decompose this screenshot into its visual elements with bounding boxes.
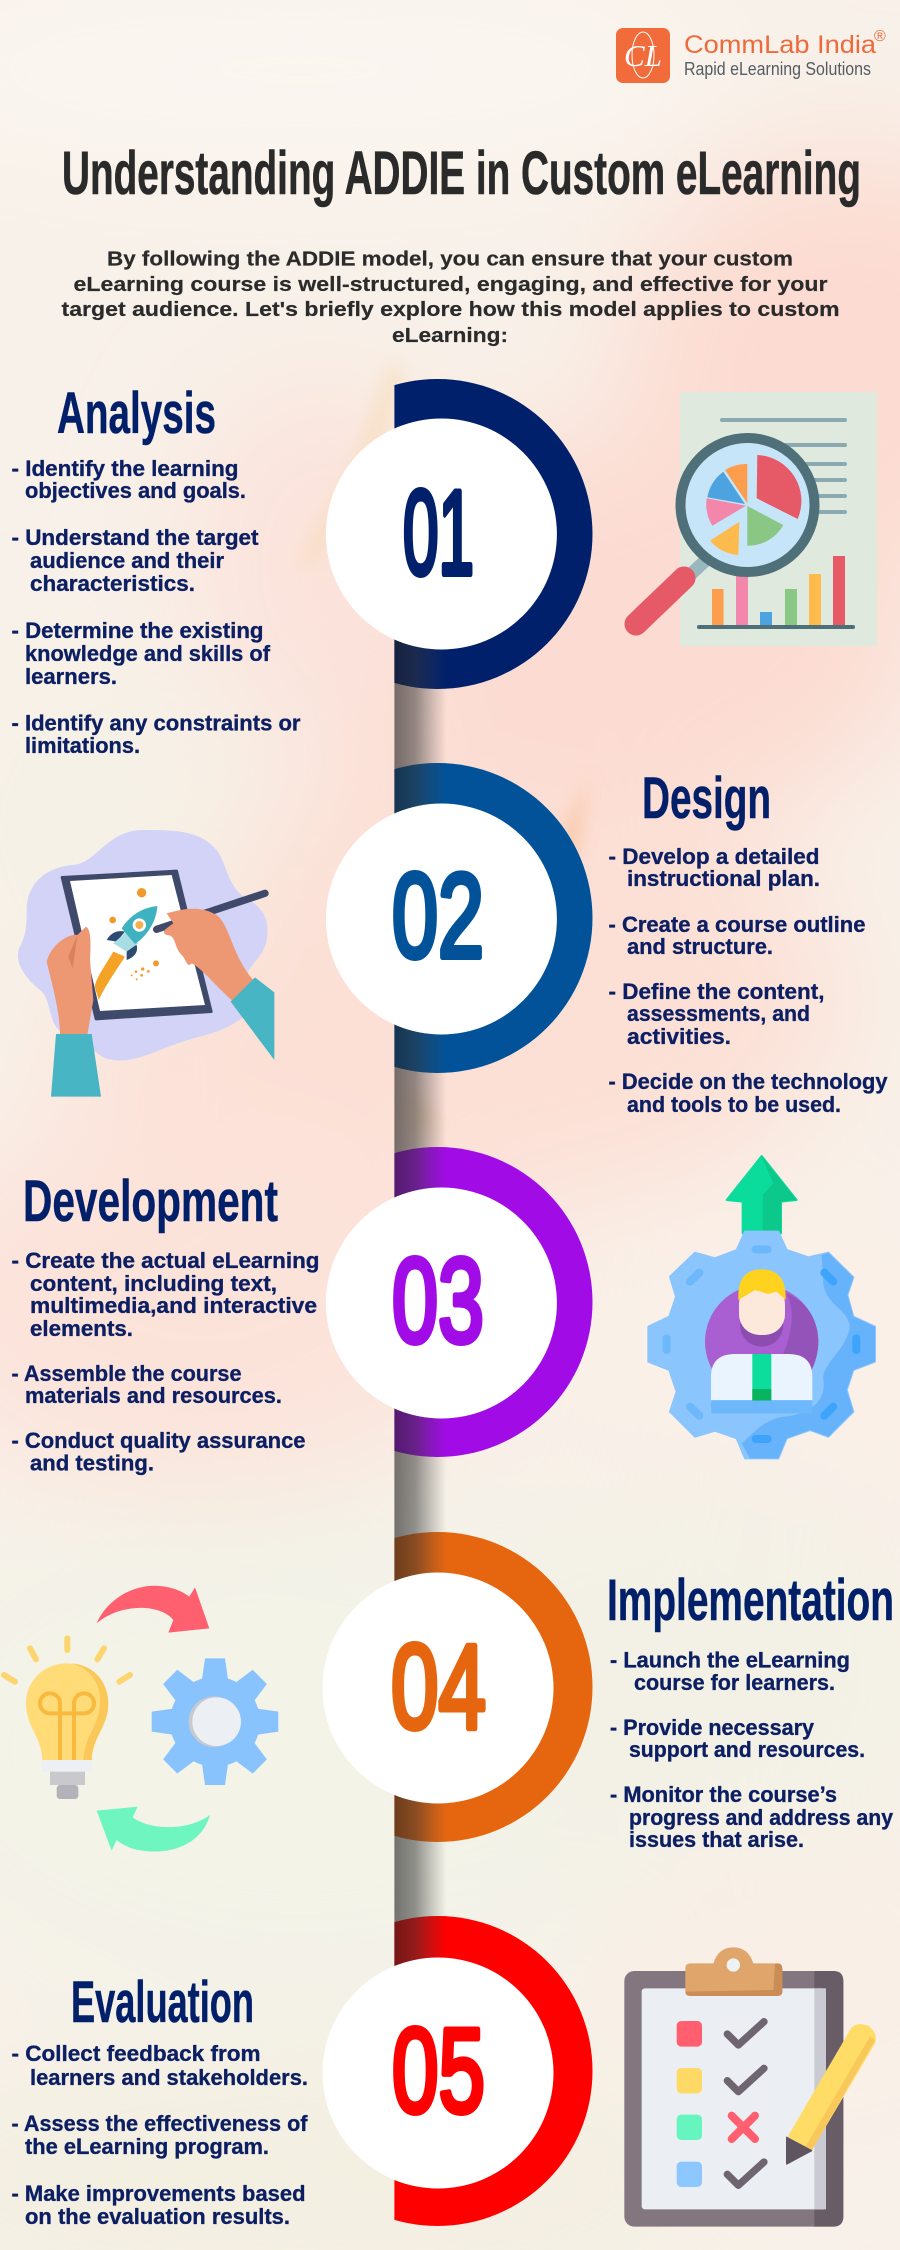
logo mark	[616, 28, 670, 83]
evaluation bullets: - Make improvements based	[12, 2181, 306, 2206]
implementation bullets: - Provide necessary	[610, 1715, 815, 1740]
logo: CommLab India	[616, 28, 886, 83]
implementation bullets: issues that arise.	[629, 1827, 804, 1852]
analysis bullets: - Identify any constraints or	[12, 710, 301, 736]
analysis bullets: limitations.	[25, 733, 140, 758]
design bullets: and tools to be used.	[627, 1092, 841, 1117]
analysis bullets: audience and their	[30, 548, 224, 573]
evaluation bullets	[12, 2041, 308, 2229]
panel: development	[12, 1169, 320, 1476]
central spine shadow	[394, 640, 446, 2080]
step 01 badge	[326, 418, 557, 650]
panel: analysis	[12, 381, 301, 758]
ring: 02	[394, 763, 592, 1073]
development bullets: content, including text,	[30, 1271, 277, 1296]
logo mark: CL	[624, 38, 662, 73]
panel: evaluation	[12, 1970, 308, 2229]
panel: design	[608, 766, 888, 1117]
evaluation bullets: the eLearning program.	[25, 2134, 269, 2159]
implementation bullets: support and resources.	[629, 1737, 865, 1762]
red arrow	[97, 1586, 209, 1633]
green arrow	[97, 1807, 210, 1852]
ring: 04	[394, 1532, 592, 1842]
analysis bullets: learners.	[25, 664, 117, 689]
analysis bullets: - Identify the learning	[12, 456, 238, 481]
implementation bullets	[610, 1648, 894, 1852]
ring: 03	[394, 1147, 592, 1457]
step 04 badge	[322, 1572, 554, 1804]
design bullets: assessments, and	[627, 1001, 810, 1026]
panel: implementation	[607, 1568, 894, 1852]
registered mark: ®	[874, 28, 886, 45]
implementation bullets: - Launch the eLearning	[610, 1648, 850, 1672]
step 02 badge	[326, 804, 557, 1034]
heading: analysis: Analysis	[57, 381, 216, 446]
step 05 badge	[322, 1958, 554, 2188]
step 01 badge: 01	[403, 466, 474, 600]
step 03 badge: 03	[392, 1234, 484, 1368]
icon: magnifier over charts	[636, 392, 877, 646]
development bullets: and testing.	[30, 1450, 154, 1476]
development bullets: multimedia,and interactive	[30, 1293, 317, 1318]
analysis bullets: - Determine the existing	[12, 618, 264, 643]
analysis bullets: characteristics.	[30, 571, 195, 596]
implementation bullets: course for learners.	[634, 1670, 835, 1695]
step 02 badge: 02	[392, 849, 484, 983]
evaluation bullets: - Collect feedback from	[12, 2041, 260, 2066]
design bullets: - Define the content,	[608, 979, 824, 1004]
ring: 01	[394, 379, 592, 689]
heading: design: Design	[642, 766, 771, 831]
analysis bullets	[12, 456, 301, 758]
development bullets: materials and resources.	[25, 1383, 282, 1408]
evaluation bullets: learners and stakeholders.	[30, 2065, 308, 2090]
design bullets: - Decide on the technology	[608, 1069, 888, 1094]
design bullets	[608, 844, 888, 1117]
design bullets: - Create a course outline	[608, 912, 866, 937]
logo name: CommLab India	[684, 31, 876, 59]
gear	[152, 1658, 278, 1785]
analysis bullets: objectives and goals.	[25, 478, 246, 503]
design bullets: - Develop a detailed	[608, 844, 820, 869]
step 05 badge: 05	[392, 2004, 485, 2138]
implementation bullets: progress and address any	[629, 1805, 894, 1830]
intro paragraph: eLearning:	[392, 324, 508, 347]
step 03 badge	[326, 1188, 557, 1418]
analysis bullets: - Understand the target	[12, 525, 259, 550]
design bullets: instructional plan.	[627, 866, 820, 891]
light bulb	[4, 1638, 130, 1799]
development bullets	[12, 1248, 320, 1476]
icon: hands drawing on a tablet	[18, 830, 274, 1097]
step 04 badge: 04	[391, 1620, 486, 1754]
development bullets: - Assemble the course	[12, 1361, 242, 1386]
intro paragraph: eLearning course is well-structured, engaging, and effective for your	[74, 273, 828, 296]
development bullets: - Conduct quality assurance	[12, 1428, 306, 1453]
development bullets: elements.	[30, 1316, 133, 1341]
icon: bulb, gear and cycle arrows	[4, 1586, 278, 1852]
analysis bullets: knowledge and skills of	[25, 641, 271, 666]
implementation bullets: - Monitor the course’s	[610, 1782, 837, 1807]
heading: development: Development	[23, 1169, 278, 1234]
intro paragraph	[62, 248, 840, 347]
evaluation bullets: - Assess the effectiveness of	[12, 2111, 308, 2136]
logo tagline: Rapid eLearning Solutions	[684, 59, 871, 79]
heading: evaluation: Evaluation	[71, 1970, 254, 2035]
evaluation bullets: on the evaluation results.	[25, 2204, 290, 2229]
icon: person in gear with up arrow	[648, 1156, 875, 1458]
development bullets: - Create the actual eLearning	[12, 1248, 320, 1273]
intro paragraph: target audience. Let's briefly explore how this model applies to custom	[62, 298, 840, 321]
ring: 05	[394, 1916, 592, 2226]
intro paragraph: By following the ADDIE model, you can ensure that your custom	[107, 248, 793, 270]
design bullets: activities.	[627, 1024, 731, 1049]
icon: clipboard checklist	[624, 1947, 876, 2227]
design bullets: and structure.	[627, 934, 773, 959]
